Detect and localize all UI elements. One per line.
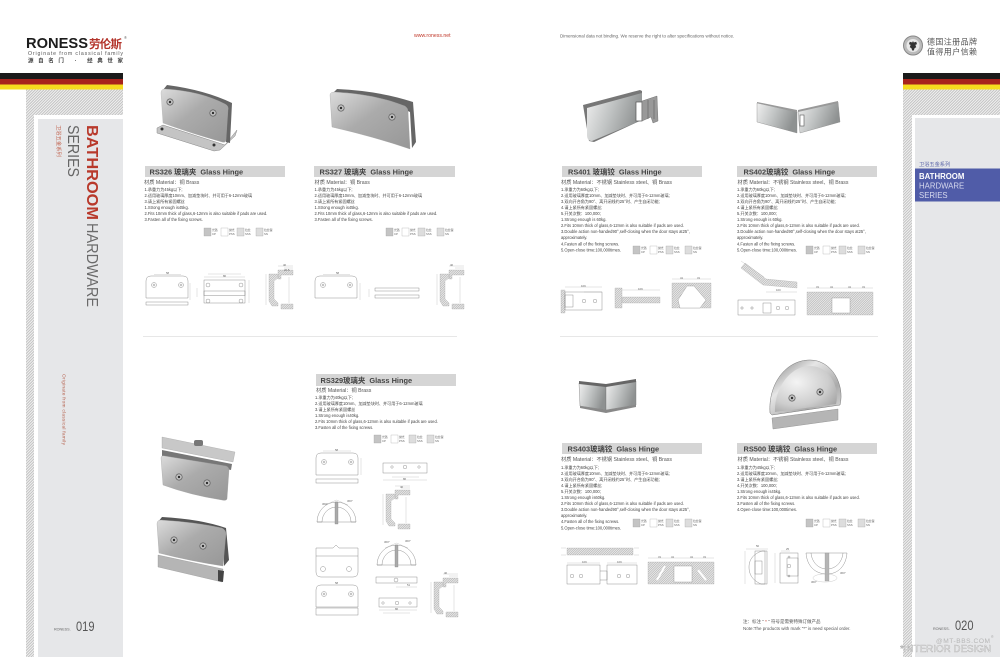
left german flag band [0, 73, 123, 90]
finish swatches: SSS [245, 232, 251, 236]
finish swatches: PSS [831, 250, 837, 254]
watermark [900, 635, 994, 655]
drawings: RS327: 58 [336, 271, 340, 275]
photo: RS329 bottom hinge [157, 517, 229, 582]
spec: RS403: 4.请上紧所有紧固螺丝; [561, 482, 602, 488]
spec: RS329: 材质 Material：铜 Brass [316, 386, 372, 394]
drawings: RS326 [146, 263, 293, 309]
finish swatches: 拉丝 [847, 519, 853, 523]
finish swatches: 光铬 [641, 519, 647, 523]
logo: RONESS: Originate from classical family [28, 51, 123, 57]
finish swatches: PSS [658, 250, 664, 254]
finish swatches: 光铬 [814, 246, 820, 250]
left vertical heading: SERIES [64, 125, 81, 177]
right page number: 020 [955, 617, 974, 633]
spec: RS402: approximately. [737, 235, 763, 240]
photo: RS402 hinge [757, 101, 840, 133]
drawings: RS402 [738, 261, 873, 315]
finish swatches [806, 519, 875, 527]
finish swatches: 抛光 [831, 519, 837, 523]
drawings: RS402: 100 [776, 288, 781, 292]
right grey panel [912, 115, 1000, 657]
spec: RS401: 2.适用玻璃厚度10mm、加减垫块时、并可用于6-12mm玻璃; [561, 192, 670, 198]
spec: RS327: 1.承重力为45kg以下; [314, 186, 352, 192]
spec: RS401: 5.开关次数：100,000; [561, 210, 601, 216]
spec: RS326: 3.Fasten all of the fixing screws. [144, 217, 203, 222]
spec: RS402: 5.Open-close time:100,000times. [737, 248, 797, 252]
drawings: RS500: 360° [811, 580, 817, 584]
spec: RS326: 3.请上紧所有紧固螺丝 [144, 198, 185, 204]
finish swatches: CP [641, 250, 645, 254]
watermark: @MT-BBS.COM [936, 638, 990, 645]
spec: RS402: 3.Double action non-handed90°,self-closing when the door stays at25°, [737, 229, 866, 234]
spec: RS329: 2.适用玻璃厚度10mm、加减垫块时、并可用于6-12mm玻璃 [315, 400, 423, 406]
spec: RS327 [314, 166, 455, 236]
spec: RS500: 4.Open-close time:100,000times. [737, 507, 797, 512]
note: Note:The products with mark "*" is need special order. [743, 626, 850, 631]
drawings: RS329: 360° [384, 540, 390, 544]
spec: RS327: 材质 Material：铜 Brass [314, 178, 370, 186]
note: 注：标注 " * " 符号是需要特殊订做产品 [743, 618, 821, 625]
spec: RS329 [315, 374, 456, 443]
drawings: RS329: 360° [405, 539, 411, 543]
drawings: RS403: 109 [617, 560, 622, 564]
finish swatches [633, 519, 702, 527]
finish swatches: 光铬 [394, 228, 400, 232]
finish swatches: 光铬 [641, 246, 647, 250]
spec: RS403: 3.双向开合角为90°、离开闭线约25°时、产生自闭功能; [561, 476, 660, 482]
right hatched sidebar [903, 89, 1000, 657]
spec: RS327: 2.适用玻璃厚度10mm、加减垫块时、并可用于6-12mm玻璃 [314, 192, 422, 198]
photo: RS401 hinge [583, 90, 658, 142]
spec: RS500: 3.请上紧所有紧固螺丝; [737, 476, 778, 482]
spec: RS327: 2.Fits 10mm thick of glass,6-12mm is also suitable if pads are used. [314, 211, 437, 216]
finish swatches: 抛光 [399, 435, 405, 439]
finish swatches: CP [212, 232, 216, 236]
spec: RS402: 4.请上紧所有紧固螺丝; [737, 204, 778, 210]
spec: RS327: RS327 玻璃夹 Glass Hinge [320, 168, 413, 176]
spec: RS403: 4.Fasten all of the fixing screws. [561, 519, 619, 524]
watermark: *INTERIOR DESIGN [900, 644, 991, 655]
note [743, 618, 850, 631]
spec: RS401: 5.Open-close time:100,000times. [561, 248, 621, 252]
drawings: RS329: 40 [444, 571, 448, 575]
photo: RS327 hinge [330, 89, 416, 149]
spec: RS403 [561, 443, 702, 530]
drawings: RS326: 26.5 [284, 268, 290, 272]
finish swatches [386, 228, 454, 236]
spec: RS500: 2.适用玻璃厚度10mm、加减垫块时、并可用于6-12mm玻璃; [737, 470, 846, 476]
finish swatches: 拉丝 [245, 228, 251, 232]
spec: RS500: 2.Fits 10mm thick of glass,6-12mm is also suitable if pads are used. [737, 495, 860, 500]
finish swatches: SN [435, 439, 439, 443]
spec: RS500: 1.Strong enough is45kg. [737, 489, 781, 494]
spec: RS401 [561, 166, 702, 254]
finish swatches: 拉丝镍 [435, 435, 444, 439]
spec: RS402: 材质 Material：不锈钢 Stainless steel、铜 Brass [738, 178, 849, 186]
logo: RONESS [26, 35, 127, 64]
finish swatches: CP [394, 232, 398, 236]
drawings: RS403: 41 [690, 555, 694, 559]
left vertical heading: HARDWARE [83, 223, 100, 307]
spec: RS326 [144, 166, 285, 236]
drawings: RS329 [316, 448, 458, 617]
finish swatches [633, 246, 702, 254]
spec: RS500 [737, 443, 877, 527]
left vertical heading [55, 125, 100, 307]
spec: RS403: 5.Open-close time:100,000times. [561, 526, 621, 530]
emblem caption [927, 36, 977, 56]
finish swatches: 抛光 [410, 228, 416, 232]
drawings: RS326: 80 [223, 274, 227, 278]
emblem caption: 德国注册品牌 [927, 36, 977, 46]
finish swatches: CP [814, 523, 818, 527]
spec: RS401: approximately. [561, 235, 587, 240]
spec: RS326: 材质 Material：铜 Brass [144, 178, 200, 186]
finish swatches: 光铬 [814, 519, 820, 523]
drawings: RS401 [561, 276, 711, 313]
spec: RS500: 材质 Material：不锈钢 Stainless steel、铜 Brass [738, 455, 849, 463]
finish swatches: 抛光 [229, 228, 235, 232]
drawings: RS329: 58 [335, 581, 339, 585]
drawings: RS402: 41 [830, 285, 834, 289]
right series band: SERIES [919, 191, 948, 200]
finish swatches: SN [866, 250, 870, 254]
spec: RS402: 4.Fasten all of the fixing screws. [737, 242, 795, 246]
finish swatches: CP [814, 250, 818, 254]
drawings: RS402: 41 [848, 285, 852, 289]
finish swatches [374, 435, 444, 443]
spec: RS401: 材质 Material：不锈钢 Stainless steel、铜 Brass [561, 178, 672, 186]
left page number [54, 618, 95, 634]
left hatched sidebar [26, 89, 123, 657]
spec: RS402: 3.双向开合角为90°、离开闭线约25°时、产生自闭功能; [737, 198, 836, 204]
finish swatches: 拉丝镍 [866, 519, 875, 523]
spec: RS403: 5.开关次数：100,000; [561, 488, 601, 494]
finish swatches: CP [382, 439, 386, 443]
drawings: RS403: 109 [582, 560, 587, 564]
top url: www.roness.net [414, 33, 451, 39]
finish swatches: 抛光 [831, 246, 837, 250]
spec: RS402: 5.开关次数：100,000; [737, 210, 777, 216]
drawings: RS401: 41 [680, 276, 684, 280]
right page number [933, 617, 974, 633]
spec: RS327: 3.Fasten all of the fixing screws. [314, 217, 373, 222]
spec: RS500: RS500 玻璃铰 Glass Hinge [744, 444, 837, 454]
finish swatches: SSS [674, 523, 680, 527]
spec: RS401: 4.Fasten all of the fixing screws. [561, 242, 619, 246]
right german flag band [903, 73, 1000, 90]
finish swatches: SN [445, 232, 449, 236]
logo: RONESS: 源自名门 · 经典世家 [28, 56, 123, 64]
emblem caption: 值得用户信赖 [927, 46, 977, 56]
finish swatches: SSS [426, 232, 432, 236]
spec: RS401: 3.双向开合角为90°、离开闭线约25°时、产生自闭功能; [561, 198, 660, 204]
spec: RS402: 2.适用玻璃厚度10mm、加减垫块时、并可用于6-12mm玻璃; [737, 192, 846, 198]
spec: RS326: 1.承重力为45kg以下; [144, 186, 182, 192]
finish swatches [204, 228, 273, 236]
finish swatches: 拉丝 [674, 519, 680, 523]
spec: RS402: 2.Fits 10mm thick of glass,6-12mm is also suitable if pads are used. [737, 223, 860, 228]
right series band [915, 168, 1000, 202]
logo: RONESS: RONESS [26, 35, 88, 52]
spec: RS401: 3.Double action non-handed90°,self-closing when the door stays at25°, [561, 229, 690, 234]
finish swatches: PSS [831, 523, 837, 527]
drawings: RS500: 50 [756, 544, 760, 548]
drawings: RS403: 41 [671, 555, 675, 559]
spec: RS401: RS401 玻璃铰 Glass Hinge [568, 168, 662, 176]
finish swatches: 拉丝 [847, 246, 853, 250]
right series band: BATHROOM [919, 172, 964, 181]
spec: RS403: 1.承重力为60kg以下; [561, 464, 599, 470]
drawings: RS401: 109 [638, 287, 643, 291]
drawings: RS402: 31 [862, 285, 866, 289]
left vertical heading: BATHROOM [83, 125, 100, 220]
drawings: RS403 [561, 548, 714, 584]
finish swatches: 拉丝 [674, 246, 680, 250]
spec: RS326: RS326 玻璃夹 Glass Hinge [150, 168, 243, 176]
drawings: RS402: 31 [816, 285, 820, 289]
photo: RS403 hinge [579, 379, 636, 413]
right series band: HARDWARE [919, 182, 964, 190]
finish swatches: CP [641, 523, 645, 527]
left vertical heading: 卫浴五金系列 [55, 125, 63, 157]
drawings: RS403: 31 [658, 555, 662, 559]
spec: RS500: 1.承重力为45kg以下; [737, 464, 775, 470]
spec: RS326: 2.适用玻璃厚度10mm、加减垫块时、并可用于6-12mm玻璃 [144, 192, 252, 198]
finish swatches: 拉丝 [426, 228, 432, 232]
spec: RS403: 2.Fits 10mm thick of glass,6-12mm is also suitable if pads are used. [561, 501, 684, 506]
finish swatches: 抛光 [658, 519, 664, 523]
spec: RS401: 4.请上紧所有紧固螺丝; [561, 204, 602, 210]
finish swatches: 拉丝镍 [866, 246, 875, 250]
finish swatches: 拉丝镍 [693, 246, 702, 250]
left grey panel [34, 115, 123, 657]
logo: RONESS: 劳伦斯 [89, 37, 122, 51]
finish swatches: SSS [847, 523, 853, 527]
finish swatches: SN [693, 250, 697, 254]
spec: RS403: 2.适用玻璃厚度10mm、加减垫块时、并可用于6-12mm玻璃; [561, 470, 670, 476]
right series caption: 卫浴五金系列 [919, 160, 950, 168]
finish swatches: 光铬 [212, 228, 218, 232]
photo: RS329 top hinge [161, 437, 235, 500]
photo: RS326 hinge [157, 85, 237, 151]
finish swatches: PSS [229, 232, 235, 236]
section dividers [143, 336, 878, 338]
finish swatches: 光铬 [382, 435, 388, 439]
spec: RS327: 1.Strong enough is45kg. [314, 205, 359, 210]
spec: RS329: 1.承重力为40kg以下; [315, 394, 353, 400]
drawings: RS329: 360° [322, 502, 328, 506]
spec: RS401: 1.承重力为60kg以下; [561, 186, 599, 192]
drawings: RS329: 86 [403, 477, 407, 481]
finish swatches: PSS [410, 232, 416, 236]
emblem: german eagle [904, 36, 922, 55]
spec: RS500: 4.开关次数：100,000; [737, 482, 777, 488]
finish swatches: SN [866, 523, 870, 527]
drawings: RS326: 58 [166, 271, 170, 275]
drawings: RS329: 40 [400, 485, 404, 489]
spec: RS403: 3.Double action non-handed90°,self-closing when the door stays at25°, [561, 507, 690, 512]
finish swatches: SN [693, 523, 697, 527]
drawings: RS326: 40 [283, 263, 287, 267]
spec: RS402: 1.承重力为60kg以下; [737, 186, 775, 192]
drawings: RS500 [745, 544, 847, 584]
spec: RS329: 2.Fits 10mm thick of glass,6-12mm is also suitable if pads are used. [315, 419, 438, 424]
left page number: 019 [76, 618, 95, 634]
finish swatches: SSS [847, 250, 853, 254]
spec: RS402 [737, 166, 877, 254]
spec: RS329: RS329玻璃夹 Glass Hinge [320, 376, 412, 385]
left vertical slogan: Originate from classical family [60, 374, 66, 446]
drawings: RS329: 51 [407, 583, 411, 587]
spec: RS500: 3.Fasten all of the fixing screws. [737, 501, 795, 506]
drawings: RS500: 25 [786, 547, 790, 551]
drawings: RS329: 58 [335, 448, 339, 452]
spec: RS326: 2.Fits 10mm thick of glass,6-12mm is also suitable if pads are used. [144, 211, 267, 216]
drawings: RS403: 31 [703, 555, 707, 559]
finish swatches: 拉丝镍 [693, 519, 702, 523]
drawings: RS500: 360° [840, 571, 846, 575]
top disclaimer: Dimensional data not binding. We reserve the right to alter specifications without notice. [560, 34, 734, 38]
finish swatches: 抛光 [658, 246, 664, 250]
logo: RONESS: ® [124, 35, 127, 40]
finish swatches: SN [264, 232, 268, 236]
drawings: RS401: 31 [697, 276, 701, 280]
drawings: RS329: 360° [347, 499, 353, 503]
spec: RS327: 3.请上紧所有紧固螺丝 [314, 198, 355, 204]
spec: RS402: 1.Strong enough is 60kg. [737, 217, 783, 222]
spec: RS403: 1.Strong enough is60kg. [561, 495, 605, 500]
finish swatches: PSS [658, 523, 664, 527]
photo: RS500 hinge [770, 360, 841, 429]
finish swatches: SSS [674, 250, 680, 254]
spec: RS329: 3.请上紧所有紧固螺丝 [315, 406, 355, 412]
spec: RS401: 2.Fits 10mm thick of glass,6-12mm is also suitable if pads are used. [561, 223, 684, 228]
left page number: RONESS. [54, 628, 71, 632]
spec: RS402: RS402玻璃铰 Glass Hinge [744, 168, 835, 176]
spec: RS401: 1.Strong enough is 60kg. [561, 217, 607, 222]
spec: RS329: 3.Fasten all of the fixing screws. [315, 425, 373, 430]
spec: RS329: 1.Strong enough is40kg. [315, 413, 359, 418]
watermark: ® [991, 635, 994, 639]
spec: RS403: RS403玻璃铰 Glass Hinge [568, 444, 659, 454]
spec: RS403: approximately. [561, 513, 587, 518]
drawings: RS327 [315, 263, 464, 309]
right page number: RONESS. [933, 627, 950, 631]
finish swatches: SSS [417, 439, 423, 443]
drawings: RS401: 109 [581, 284, 586, 288]
spec: RS326: 1.Strong enough is45kg. [144, 205, 189, 210]
drawings: RS327: 40 [450, 263, 454, 267]
spec: RS403: 材质 Material：不锈钢 Stainless steel、铜 Brass [561, 455, 672, 463]
finish swatches: 拉丝 [417, 435, 423, 439]
finish swatches [806, 246, 875, 254]
finish swatches: 拉丝镍 [264, 228, 273, 232]
drawings: RS329: 86 [395, 607, 399, 611]
finish swatches: PSS [399, 439, 405, 443]
finish swatches: 拉丝镍 [445, 228, 454, 232]
